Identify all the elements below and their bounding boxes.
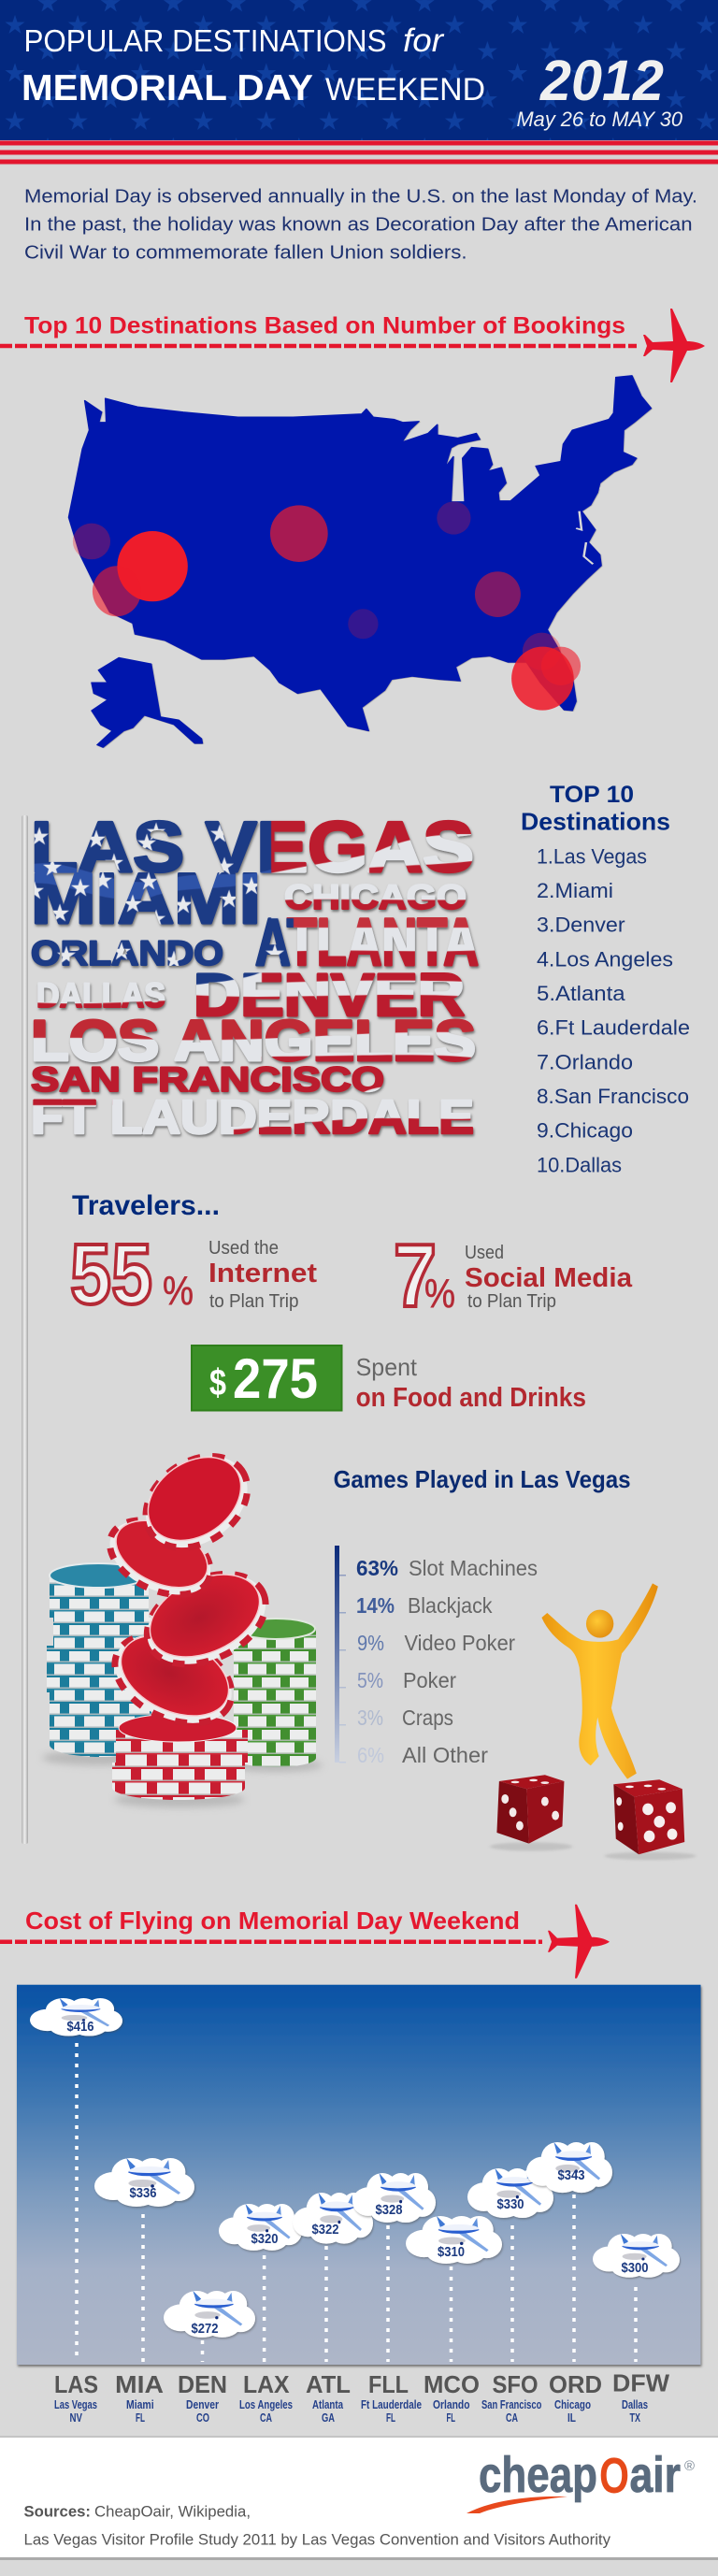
airport codes: LAS: [54, 2370, 98, 2398]
cloud: SFO $330: $330: [497, 2196, 524, 2212]
list items: 2.Miami: [537, 879, 613, 902]
state codes: GA: [322, 2411, 335, 2425]
cloud: DFW $300: $300: [621, 2260, 649, 2276]
logo: cheapOair: ®: [684, 2458, 695, 2474]
stat: $275 spent on food and drinks: 275: [233, 1347, 318, 1410]
city names: Atlanta: [312, 2397, 344, 2411]
row: blackjack: [356, 1593, 493, 1618]
stat: $275 spent on food and drinks: on Food and Drinks: [356, 1383, 586, 1413]
bubble: Denver: [270, 505, 328, 562]
title line 1: for: [403, 22, 444, 59]
row: poker: Poker: [403, 1668, 456, 1692]
list items: 5.Atlanta: [537, 982, 625, 1005]
list heading: [521, 782, 670, 836]
title line 2: MEMORIAL DAY: [22, 68, 313, 108]
bubble: Los Angeles: [93, 566, 141, 616]
row: video poker: 9%: [357, 1631, 384, 1655]
stat: 7% used social media: %: [424, 1271, 455, 1317]
list items: [537, 844, 690, 1176]
falling chip 1: [128, 1437, 265, 1566]
city names: Las Vegas: [54, 2397, 97, 2411]
dotted drop lines: [77, 2043, 636, 2362]
list items: 7.Orlando: [537, 1050, 633, 1073]
word cloud of destination names: CHICAGO: [284, 878, 467, 916]
list items: 3.Denver: [537, 914, 625, 937]
cloud: ORD $343: $343: [557, 2167, 585, 2183]
airport codes: SFO: [492, 2370, 538, 2398]
bubble: Chicago: [437, 501, 471, 535]
cloud: DEN $272: $272: [191, 2321, 219, 2337]
illustration: casino chips: [42, 1437, 323, 1807]
cloud: ATL $322: $322: [312, 2222, 338, 2238]
icon: left die: [490, 1775, 572, 1851]
word cloud of destination names: DALLAS: [36, 976, 165, 1015]
cloud: ORD $343: [526, 2142, 612, 2193]
row: all other: All Other: [402, 1743, 488, 1767]
row: craps: 3%: [357, 1705, 383, 1730]
state codes: NV: [69, 2411, 82, 2425]
bubble: Miami: [511, 647, 574, 711]
word cloud of destination names: MIAMI: [31, 859, 261, 939]
cloud: LAX $320: $320: [251, 2231, 279, 2247]
cloud: DFW $300: [593, 2234, 680, 2278]
cloud: FLL $328: [352, 2173, 436, 2223]
stat: 7% used social media: to Plan Trip: [467, 1291, 556, 1312]
falling chip 4: [101, 1618, 246, 1741]
heading: travelers: Travelers...: [72, 1190, 220, 1221]
sky panel: [17, 1985, 701, 2365]
chart: flight prices by city: [17, 1985, 701, 2365]
section heading: cost of flying: Cost of Flying on Memorial Day Weekend: [25, 1907, 520, 1935]
city names: Denver: [186, 2397, 219, 2411]
row: poker: [357, 1668, 456, 1692]
list items: 10.Dallas: [537, 1153, 622, 1176]
cloud: MIA $336: $336: [129, 2185, 157, 2201]
games heading: Games Played in Las Vegas: [334, 1465, 631, 1493]
stat: 7% used social media: [394, 1226, 633, 1326]
axis labels: airports: [54, 2369, 669, 2425]
stat: 55% used the internet: to Plan Trip: [209, 1291, 299, 1312]
list items: 1.Las Vegas: [537, 844, 647, 868]
header banner: [0, 0, 718, 140]
state codes: FL: [386, 2411, 395, 2425]
intro text: In the past, the holiday was known as Decoration Day after the American: [24, 215, 693, 236]
row: video poker: [357, 1631, 515, 1655]
word cloud of destination names: ORLANDO: [31, 934, 223, 972]
row: slot machines: 63%: [356, 1556, 398, 1580]
section heading: cost of flying: [0, 1905, 610, 1979]
cloud: MCO $310: [406, 2216, 502, 2264]
coast detail: [576, 478, 616, 564]
row: slot machines: [356, 1556, 538, 1580]
row: craps: [357, 1705, 453, 1730]
intro text: Civil War to commemorate fallen Union soldiers.: [24, 243, 467, 264]
row: blackjack: Blackjack: [408, 1593, 493, 1618]
logo: cheapOair: O: [599, 2448, 629, 2504]
stat: 7% used social media: Social Media: [465, 1263, 633, 1293]
word cloud of destination names: ATLANTA: [255, 906, 479, 980]
cloud: ATL $322: [293, 2193, 373, 2244]
airport codes: [54, 2369, 669, 2398]
row: all other: 6%: [357, 1743, 384, 1767]
panel: games played in Las Vegas: [334, 1465, 631, 1767]
stat: 55% used the internet: Internet: [208, 1259, 317, 1288]
stat: $275 spent on food and drinks: Spent: [356, 1353, 418, 1381]
airport codes: MIA: [115, 2370, 164, 2398]
airport codes: DEN: [178, 2370, 227, 2398]
contiguous US: [68, 376, 651, 731]
bubble: San Francisco: [73, 524, 110, 559]
stat: $275 spent on food and drinks: $: [209, 1362, 226, 1403]
bubble: Orlando: [523, 633, 561, 670]
city names: Los Angeles: [239, 2397, 293, 2411]
icon: airplane: [548, 1905, 610, 1979]
list items: 9.Chicago: [537, 1119, 633, 1143]
cloud: LAS $416: $416: [67, 2019, 93, 2035]
green chip stack: [229, 1619, 323, 1772]
row: video poker: Video Poker: [404, 1631, 515, 1655]
state codes: IL: [567, 2411, 576, 2425]
airport codes: ATL: [306, 2370, 351, 2398]
state codes: FL: [136, 2411, 145, 2425]
city names: Chicago: [554, 2397, 591, 2411]
stat: $275 spent on food and drinks: [192, 1346, 586, 1413]
bubble: Atlanta: [475, 571, 521, 617]
cloud: MCO $310: $310: [438, 2244, 465, 2260]
list heading: Destinations: [521, 808, 670, 836]
intro text: [24, 187, 697, 264]
dates: May 26 to MAY 30: [516, 108, 683, 131]
city names: Ft Lauderdale: [361, 2397, 422, 2411]
cloud: DEN $272: [164, 2291, 255, 2338]
row: slot machines: Slot Machines: [409, 1556, 538, 1580]
state codes: CA: [260, 2411, 272, 2425]
Alaska: [92, 657, 202, 747]
word cloud of destination names: SAN FRANCISCO: [31, 1060, 384, 1099]
state codes: CO: [196, 2411, 209, 2425]
intro text: Memorial Day is observed annually in the U.S. on the last Monday of May.: [24, 187, 697, 208]
cloud: LAX $320: [219, 2204, 302, 2251]
row: craps: Craps: [402, 1705, 453, 1730]
icon: airplane: [643, 309, 705, 382]
logo: cheapOair: [467, 2447, 695, 2513]
logo: cheapOair: cheap: [479, 2447, 597, 2503]
word cloud of destination names: FT LAUDERDALE: [31, 1090, 474, 1144]
city names: Miami: [126, 2397, 154, 2411]
cloud: LAS $416: [30, 1998, 122, 2036]
cloud: SFO $330: [467, 2168, 553, 2218]
title line 2: [22, 68, 485, 108]
illustration: cheering figure: [541, 1583, 658, 1779]
section heading: top 10 destinations: [0, 309, 705, 382]
city names: [54, 2397, 648, 2411]
stat: 55% used the internet: 55: [70, 1227, 152, 1322]
stat: 55% used the internet: %: [163, 1268, 194, 1314]
state codes: TX: [630, 2411, 640, 2425]
word cloud of destination names: [31, 808, 479, 1144]
airport codes: DFW: [612, 2369, 669, 2397]
logo: cheapOair: air: [630, 2447, 681, 2503]
bubble: Dallas: [348, 609, 379, 639]
word cloud of destination names: LOS ANGELES: [31, 1009, 476, 1072]
airport codes: FLL: [368, 2370, 409, 2398]
airport codes: MCO: [424, 2370, 480, 2398]
state codes: FL: [447, 2411, 455, 2425]
sources: Las Vegas Visitor Profile Study 2011 by Las Vegas Convention and Visitors Authority: [24, 2531, 610, 2549]
falling chip 3: [133, 1556, 280, 1682]
list items: 6.Ft Lauderdale: [537, 1016, 690, 1040]
row: all other: [357, 1743, 488, 1767]
row: poker: 5%: [357, 1668, 383, 1692]
sources: Sources:: [24, 2503, 91, 2521]
year: 2012: [539, 49, 664, 112]
section heading: top 10 destinations: Top 10 Destinations Based on Number of Bookings: [24, 313, 625, 339]
list heading: TOP 10: [550, 782, 634, 808]
icon: right die: [605, 1779, 696, 1860]
footer panel: [0, 2436, 718, 2560]
sources: [24, 2503, 610, 2549]
list items: 8.San Francisco: [537, 1085, 689, 1108]
stat: 7% used social media: Used: [465, 1243, 504, 1263]
state codes: CA: [506, 2411, 518, 2425]
bubble: Ft Lauderdale: [541, 647, 581, 685]
airport codes: LAX: [243, 2370, 290, 2398]
scale bar: [335, 1546, 346, 1763]
word cloud of destination names: LAS VEGAS: [31, 808, 474, 887]
flag pole: [22, 815, 28, 1844]
sources: CheapOair, Wikipedia,: [94, 2503, 251, 2521]
city names: Orlando: [433, 2397, 470, 2411]
teal chip stack: [42, 1563, 154, 1765]
panel: top 10 destinations list: [521, 782, 690, 1176]
airport codes: ORD: [549, 2370, 602, 2398]
red chip stack: [112, 1714, 248, 1807]
title line 2: WEEKEND: [325, 72, 485, 108]
list items: 4.Los Angeles: [537, 947, 673, 971]
city names: Dallas: [622, 2397, 648, 2411]
falling chip 2: [98, 1505, 223, 1609]
state codes: [69, 2411, 640, 2425]
flag stripes: [0, 140, 718, 165]
cloud: MIA $336: [94, 2158, 194, 2207]
stat: 7% used social media: 7: [394, 1226, 437, 1326]
bubble: Las Vegas: [117, 531, 188, 601]
cloud: FLL $328: $328: [376, 2202, 402, 2218]
word cloud of destination names: DENVER: [194, 961, 465, 1029]
row: blackjack: 14%: [356, 1593, 395, 1618]
city names: San Francisco: [481, 2397, 541, 2411]
title line 1: POPULAR DESTINATIONS: [24, 23, 387, 58]
stat: 55% used the internet: Used the: [208, 1238, 279, 1259]
stat: 55% used the internet: [70, 1227, 317, 1322]
map of the United States: [68, 376, 651, 747]
